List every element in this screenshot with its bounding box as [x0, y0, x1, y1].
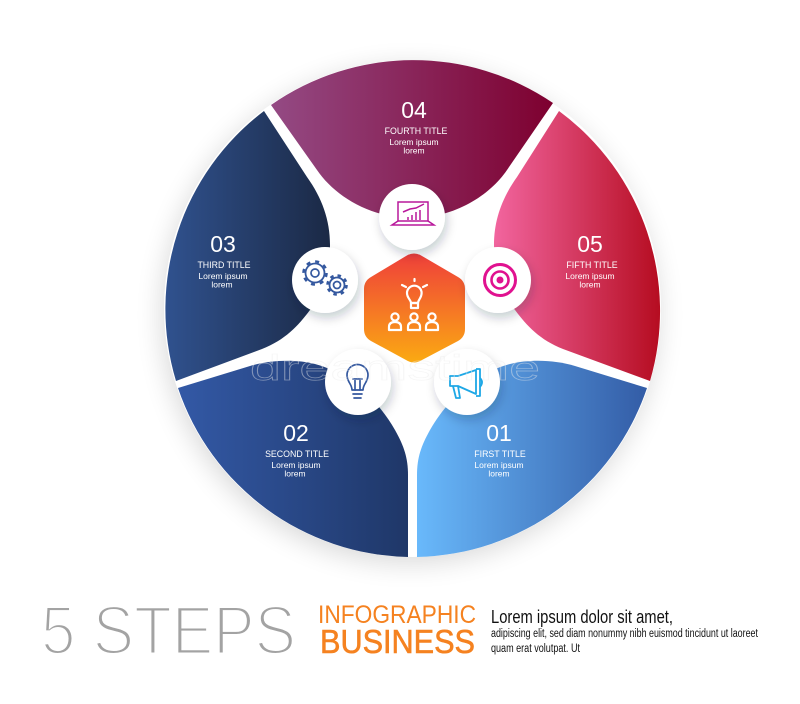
icon: light bulb [325, 349, 391, 415]
heading: business: BUSINESS [320, 623, 475, 660]
text: first lorem: lorem [488, 468, 510, 478]
text: fifth lorem: Lorem ipsum [565, 271, 615, 281]
label: fifth title: FIFTH TITLE [566, 260, 618, 270]
heading: 01: 01 [486, 420, 512, 446]
label: second title: SECOND TITLE [265, 449, 329, 459]
text: second lorem: Lorem ipsum [271, 460, 321, 470]
text: description [491, 607, 759, 655]
label: first title: FIRST TITLE [474, 449, 526, 459]
heading: 03: 03 [210, 231, 236, 257]
text: third lorem: Lorem ipsum [198, 271, 248, 281]
heading: 02: 02 [283, 420, 309, 446]
icon: target [465, 247, 531, 313]
icon: gears [292, 247, 358, 313]
heading: 04: 04 [401, 97, 427, 123]
panel: segment 05 [494, 111, 660, 381]
panel: segment 02 [178, 361, 408, 557]
panel: segment 03 [165, 111, 330, 381]
panel: segment 04 [271, 60, 553, 218]
icon: laptop chart [379, 184, 445, 250]
heading: infographic: INFOGRAPHIC [318, 601, 476, 629]
label: fourth title: FOURTH TITLE [385, 126, 447, 136]
panel: segment 01 [417, 361, 647, 557]
label: third title: THIRD TITLE [197, 260, 251, 270]
icon: megaphone [434, 349, 500, 415]
text: third lorem: lorem [211, 280, 233, 290]
text: fifth lorem: lorem [579, 280, 601, 290]
text: description: quam erat volutpat. Ut [491, 643, 581, 655]
watermark: dreamstime [250, 347, 540, 388]
text: fourth lorem: lorem [403, 146, 425, 156]
text: fourth lorem: Lorem ipsum [389, 137, 439, 147]
heading: 05: 05 [577, 231, 603, 257]
text: description: Lorem ipsum dolor sit amet, [491, 607, 673, 627]
title: 5 steps: 5 STEPS [41, 592, 296, 669]
text: second lorem: lorem [284, 468, 306, 478]
text: first lorem: Lorem ipsum [474, 460, 524, 470]
icon: center hexagon with idea and team [364, 254, 465, 362]
outer shadow [163, 68, 657, 562]
